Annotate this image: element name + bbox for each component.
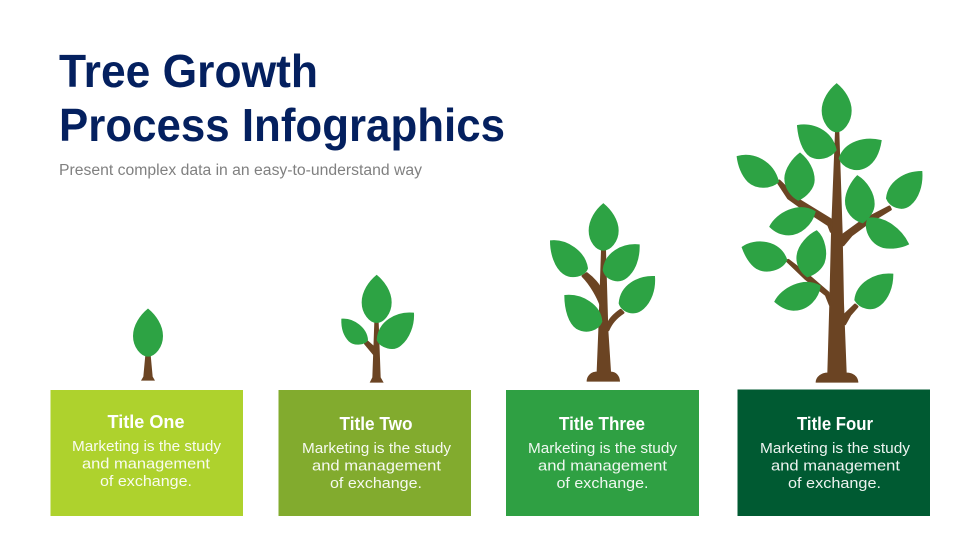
panel: title four: of exchange. xyxy=(788,475,881,492)
leaves xyxy=(737,84,922,310)
panel: title two: Marketing is the study xyxy=(302,440,452,457)
panel: title two: of exchange. xyxy=(330,475,422,492)
title: Process Infographics xyxy=(59,99,505,151)
panel: title one: Marketing is the study xyxy=(72,438,222,455)
panel: title four: and management xyxy=(771,458,901,474)
panel: title one: and management xyxy=(82,456,211,472)
panel: title three: Title Three xyxy=(559,414,645,434)
panel: title four: Title Four xyxy=(797,414,873,434)
leaves xyxy=(551,204,654,331)
panel: title two: Title Two xyxy=(340,414,412,434)
leaf xyxy=(134,309,162,356)
panel: title three: and management xyxy=(538,458,668,474)
panel: title two: and management xyxy=(312,458,442,474)
panel: title four xyxy=(738,390,930,516)
panel: title three xyxy=(506,390,699,516)
panel: title three: Marketing is the study xyxy=(528,440,678,457)
tree stage four: mature tree xyxy=(737,84,922,383)
panel: title one xyxy=(50,390,243,516)
trunk xyxy=(141,355,155,381)
panel: title four: Marketing is the study xyxy=(760,440,911,457)
title xyxy=(59,45,505,151)
tree stage one: seedling xyxy=(134,309,162,381)
trunk and branch xyxy=(365,322,384,383)
panel: title three: of exchange. xyxy=(556,475,648,492)
trunk and branches xyxy=(583,250,623,382)
trunk and branches xyxy=(777,132,891,383)
leaves xyxy=(342,276,413,348)
panel: title one: Title One xyxy=(108,412,184,432)
title: Tree Growth xyxy=(59,45,318,97)
subtitle: Present complex data in an easy-to-understand way xyxy=(59,162,422,179)
tree stage three: young tree xyxy=(551,204,654,382)
panel: title one: of exchange. xyxy=(100,473,192,490)
panel: title two xyxy=(278,390,471,516)
tree stage two: sapling xyxy=(342,276,413,383)
